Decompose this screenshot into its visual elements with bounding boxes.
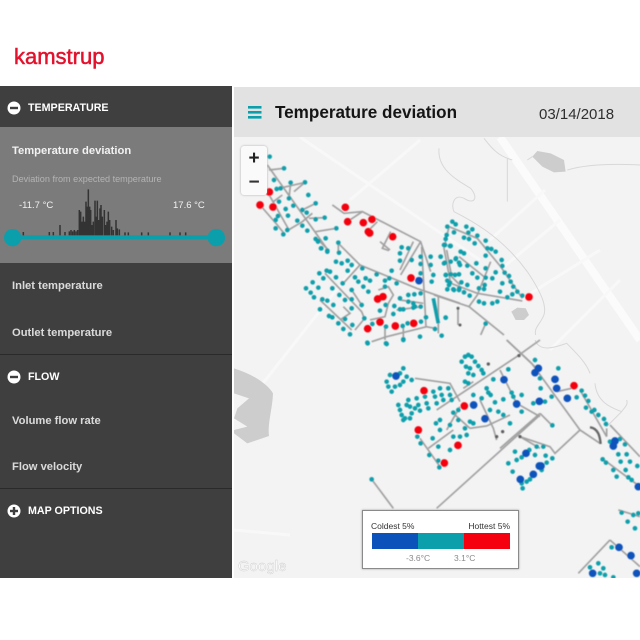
panel: sidebar bbox=[0, 86, 232, 578]
logo: kamstrup: kamstrup bbox=[14, 44, 104, 69]
icon: map options expand bbox=[8, 504, 20, 518]
sensors: dark valves bbox=[458, 308, 520, 437]
pipes: north-west bbox=[260, 165, 431, 275]
map base: contour lines bbox=[439, 138, 640, 427]
icon: temperature collapse bbox=[8, 102, 20, 114]
text: flow velocity: Flow velocity bbox=[12, 461, 82, 473]
histogram bars bbox=[23, 189, 186, 236]
lake: west bbox=[234, 368, 273, 443]
legend swatch: blue bbox=[372, 533, 418, 549]
heading: map options: MAP OPTIONS bbox=[28, 505, 103, 517]
title: Temperature deviation bbox=[275, 103, 457, 122]
panel: header bar bbox=[234, 87, 640, 137]
pipe: dark service line bbox=[590, 427, 601, 444]
lake: small bbox=[511, 308, 529, 320]
pipes: south-central bbox=[372, 340, 540, 508]
legend value: upper threshold: 3.1°C bbox=[454, 553, 475, 563]
icon: flow collapse bbox=[8, 370, 20, 384]
pipes: east bbox=[500, 340, 640, 573]
divider: map options bbox=[0, 488, 232, 489]
map bbox=[234, 137, 640, 578]
zoom control bbox=[241, 146, 267, 195]
text: inlet temperature: Inlet temperature bbox=[12, 280, 103, 292]
text: temperature deviation: Temperature deviation bbox=[12, 145, 131, 157]
panel: selected temperature deviation bbox=[0, 127, 232, 263]
sensors: teal bbox=[270, 157, 638, 577]
heading: temperature: TEMPERATURE bbox=[28, 102, 109, 114]
text: minimum value: -11.7 °C bbox=[19, 200, 53, 211]
text: outlet temperature: Outlet temperature bbox=[12, 327, 112, 339]
button: zoom out: − bbox=[248, 172, 260, 193]
sensors: coldest blue bbox=[396, 281, 638, 573]
button: zoom in: + bbox=[248, 148, 260, 169]
pipes: north-east bbox=[434, 227, 522, 335]
legend bbox=[362, 510, 519, 569]
network bbox=[260, 157, 640, 577]
sensors: hottest red bbox=[260, 192, 574, 463]
text: date: 03/14/2018 bbox=[539, 106, 614, 123]
legend value: lower threshold: -3.6°C bbox=[406, 553, 430, 563]
slider track bbox=[13, 235, 217, 239]
lake: north bbox=[532, 151, 566, 172]
divider: flow bbox=[0, 354, 232, 355]
slider handle: maximum bbox=[208, 229, 225, 246]
map base: roads bbox=[234, 137, 640, 535]
pipes: central bbox=[320, 242, 460, 342]
map base: water and boundaries bbox=[234, 151, 566, 443]
text: maximum value: 17.6 °C bbox=[173, 200, 205, 211]
chart: histogram with range slider bbox=[4, 189, 225, 246]
legend swatch: red bbox=[464, 533, 510, 549]
pipes: teal thick segments bbox=[433, 298, 438, 323]
legend swatch: teal bbox=[418, 533, 464, 549]
legend label: coldest: Coldest 5% bbox=[371, 521, 414, 531]
slider handle: minimum bbox=[4, 229, 21, 246]
legend label: hottest: Hottest 5% bbox=[468, 521, 510, 531]
icon: menu bbox=[248, 106, 262, 119]
text: description: Deviation from expected temperature bbox=[12, 174, 162, 184]
text: volume flow rate: Volume flow rate bbox=[12, 415, 101, 427]
heading: flow: FLOW bbox=[28, 371, 59, 383]
text: map attribution: Google bbox=[238, 558, 286, 575]
